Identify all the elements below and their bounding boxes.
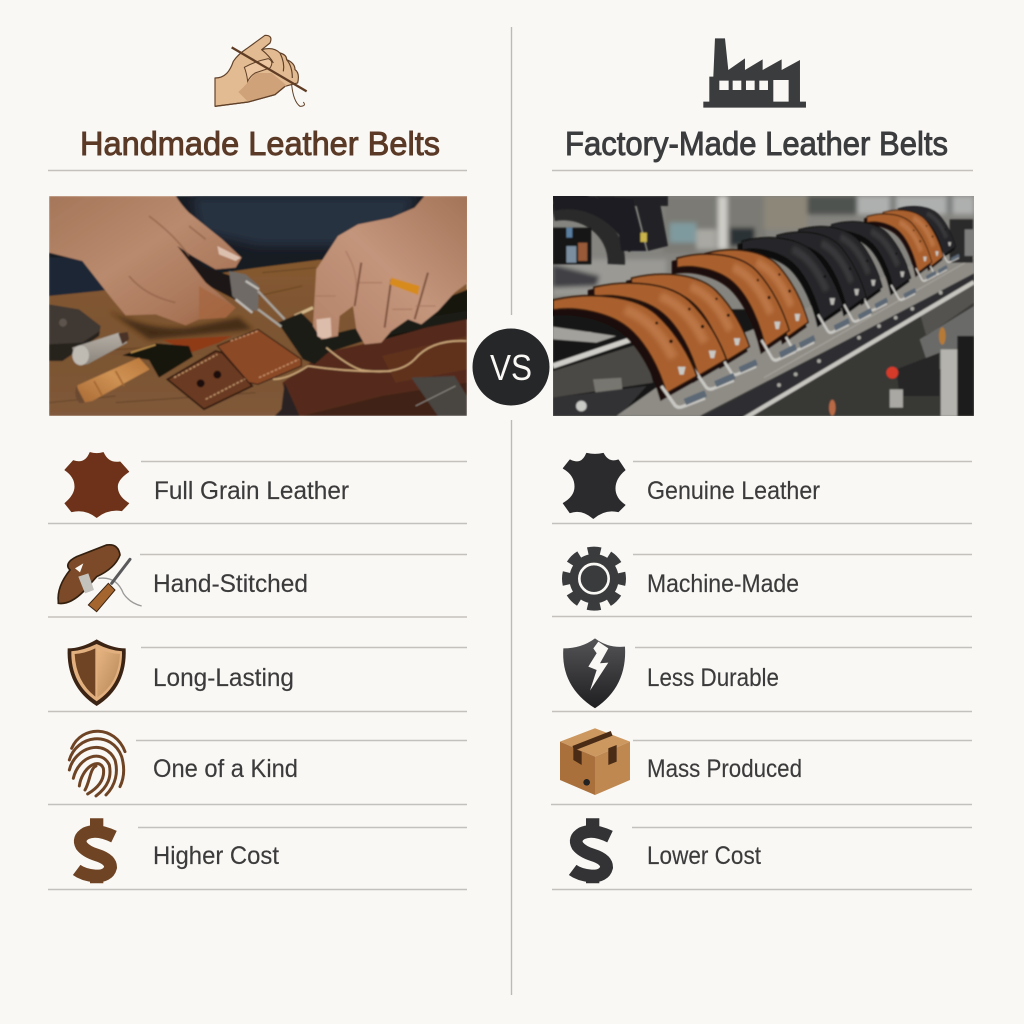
icon: cardboard box	[560, 728, 630, 795]
pliers	[183, 252, 236, 300]
icon: fingerprint	[69, 731, 125, 796]
row: full grain leather	[48, 453, 467, 524]
icon: brown dollar	[77, 818, 114, 883]
conveyor shelf and machine base	[700, 274, 974, 416]
icon: leather and awl	[58, 545, 142, 612]
machine bed	[553, 309, 770, 416]
table tools, left	[49, 304, 101, 346]
row: mass produced	[551, 728, 972, 804]
row: hand-stitched: Hand-Stitched	[153, 570, 308, 598]
row: mass produced: Mass Produced	[647, 755, 802, 783]
badge: VS: VS	[490, 347, 532, 388]
table tools, right	[275, 383, 300, 416]
row: one of a kind	[48, 731, 467, 804]
icon: black leather hide	[563, 453, 625, 518]
icon: factory	[703, 38, 806, 108]
photo: artisan stitching belt	[49, 196, 468, 416]
row: long-lasting	[48, 639, 467, 712]
row: full grain leather: Full Grain Leather	[154, 477, 349, 505]
row: genuine leather: Genuine Leather	[647, 477, 820, 505]
icon: hand stitching	[215, 35, 307, 106]
icon: dark dollar	[573, 818, 610, 883]
heading: handmade: Handmade Leather Belts	[80, 125, 440, 162]
right hand	[313, 196, 468, 344]
left hand	[49, 196, 242, 325]
row: less durable: Less Durable	[647, 664, 779, 692]
row: machine-made	[552, 551, 972, 616]
badge: VS	[469, 325, 553, 409]
row: long-lasting: Long-Lasting	[153, 664, 294, 692]
row: lower cost	[552, 818, 972, 890]
row: higher cost: Higher Cost	[153, 842, 279, 870]
row: less durable	[552, 638, 972, 712]
icon: brown leather hide	[65, 453, 129, 517]
row: lower cost: Lower Cost	[647, 842, 761, 870]
row: one of a kind: One of a Kind	[153, 755, 298, 783]
heading: factory-made: Factory-Made Leather Belts	[565, 125, 948, 162]
row: machine-made: Machine-Made	[647, 570, 799, 598]
panel: factory-made leather belts	[548, 38, 974, 890]
belts, back to front	[896, 206, 959, 262]
row: hand-stitched	[48, 545, 467, 617]
photo: belts on production line	[553, 196, 974, 416]
icon: brown shield	[68, 639, 126, 706]
icon: cracked shield	[563, 638, 625, 708]
panel: handmade leather belts	[48, 35, 468, 890]
icon: gear	[566, 551, 622, 606]
row: higher cost	[48, 818, 467, 890]
row: genuine leather	[552, 453, 972, 524]
